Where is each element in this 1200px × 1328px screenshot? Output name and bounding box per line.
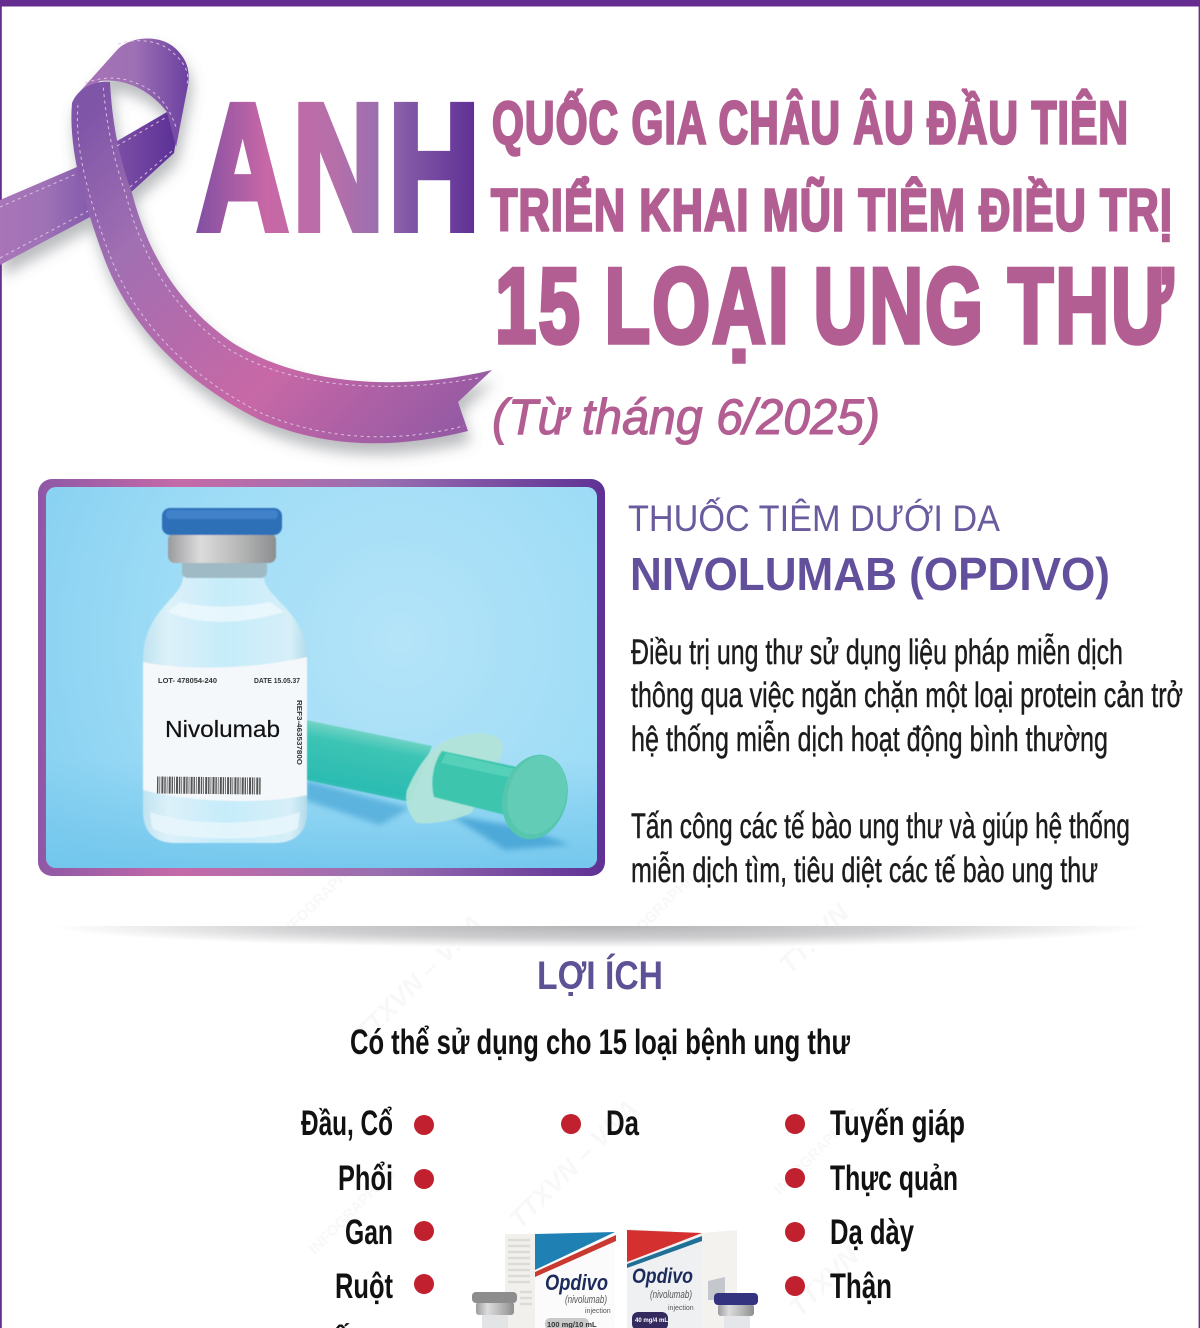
benefits subheading: Có thể sử dụng cho 15 loại bệnh ung thư <box>350 1023 850 1062</box>
photo panel: Nivolumab vial and syringe: DATE 15.05.37 <box>254 676 300 685</box>
benefits heading: LỢI ÍCH <box>537 953 663 998</box>
watermarks <box>276 849 865 1322</box>
watermarks: TTXVN <box>783 1240 865 1322</box>
red box: injection <box>668 1305 694 1312</box>
red box <box>627 1229 737 1328</box>
watermarks: TTXVN – VNA <box>348 909 489 1049</box>
photo panel: Nivolumab vial and syringe: Nivolumab <box>165 716 280 742</box>
red box: 40 mg/4 mL <box>635 1318 668 1324</box>
cancer list: right column: Thực quản <box>830 1159 958 1198</box>
watermarks: INFOGRAPHICS <box>276 849 369 943</box>
drug type label: THUỐC TIÊM DƯỚI DA <box>628 497 1000 539</box>
blue vial <box>714 1293 758 1328</box>
cancer list: right column: Thận <box>830 1267 892 1306</box>
cancer list: centre column: Da <box>606 1104 639 1143</box>
cancer list: left column: Gan <box>345 1213 393 1252</box>
red box: Opdivo <box>632 1265 693 1288</box>
photo panel: Nivolumab vial and syringe: LOT- 478054-240 <box>158 676 217 685</box>
blue box: Opdivo <box>545 1270 608 1295</box>
red box: (nivolumab) <box>650 1289 692 1301</box>
blue box: injection <box>585 1308 611 1315</box>
cancer list: left column: Đầu, Cổ <box>301 1104 393 1143</box>
cancer list: left column: Ruột <box>335 1267 393 1306</box>
title: country: ANH <box>197 67 484 267</box>
watermarks: INFOGRAPHICS <box>306 1164 399 1258</box>
photo panel: Nivolumab vial and syringe: REF3-46353780O <box>295 700 304 765</box>
watermarks: INFOGRAPHICS <box>616 859 709 953</box>
watermarks: INFOGRAPHICS <box>771 1104 864 1198</box>
drug name: NIVOLUMAB (OPDIVO) <box>630 548 1110 600</box>
blue box: (nivolumab) <box>565 1294 607 1306</box>
description paragraph 2 <box>631 807 1130 890</box>
cancer list: right column <box>785 1104 965 1306</box>
gray vial <box>472 1292 517 1328</box>
watermarks: TTXVN <box>773 897 855 979</box>
purple cancer ribbon <box>0 38 492 443</box>
cancer list: centre column <box>561 1104 639 1143</box>
vial <box>143 508 307 843</box>
cancer list: right column: Tuyến giáp <box>830 1104 965 1143</box>
date subtitle: (Từ tháng 6/2025) <box>492 389 880 445</box>
syringe <box>305 720 577 850</box>
description paragraph 1 <box>631 633 1183 759</box>
watermarks: TTXVN – VNA <box>503 1094 644 1234</box>
Opdivo product photo <box>472 1229 758 1328</box>
cancer list: right column: Dạ dày <box>830 1213 914 1252</box>
photo panel: Nivolumab vial and syringe <box>38 479 605 876</box>
cancer list: left column <box>301 1104 434 1328</box>
blue box <box>505 1232 616 1328</box>
cancer list: left column: Phổi <box>338 1159 393 1198</box>
divider shadow <box>50 926 1150 948</box>
